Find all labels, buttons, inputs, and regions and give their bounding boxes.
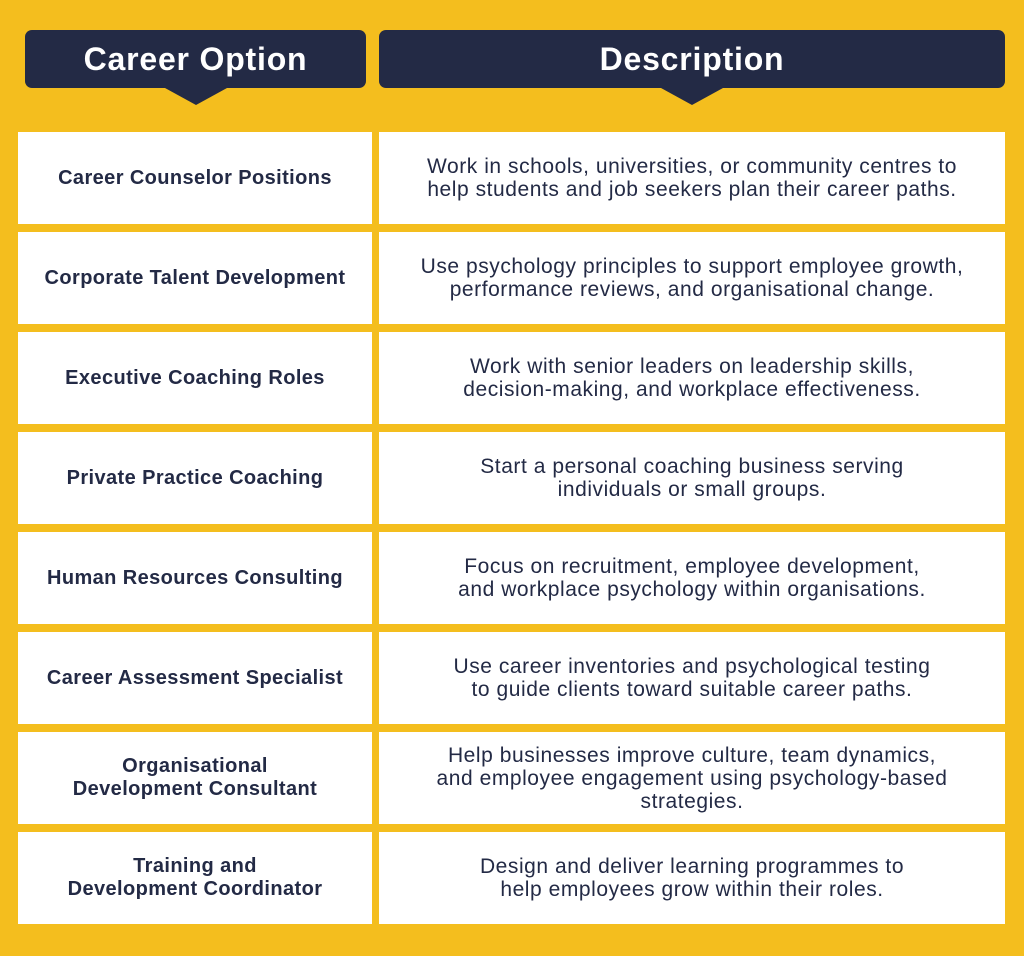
row 5 option: [18, 532, 372, 624]
row 6 option: [18, 632, 372, 724]
row 8 option: Development Coordinator: [68, 878, 322, 900]
row 1 option: Career Counselor Positions: [58, 166, 332, 188]
row 1 description: Work in schools, universities, or community centres to: [427, 155, 957, 178]
row 6 description: [379, 632, 1005, 724]
row 8 option: Training and: [133, 855, 257, 877]
row 3 description: [379, 332, 1005, 424]
row 7 description: and employee engagement using psychology-based: [437, 766, 947, 790]
row 6 description: to guide clients toward suitable career paths.: [472, 678, 912, 701]
row 1 option: [18, 132, 372, 224]
row 7 description: [379, 732, 1005, 824]
row 6 option: Career Assessment Specialist: [47, 666, 343, 688]
header: description: Description: [600, 40, 784, 76]
row 5 option: Human Resources Consulting: [47, 566, 343, 588]
row 2 description: [379, 232, 1005, 324]
header: description: [379, 30, 1005, 88]
row 3 description: Work with senior leaders on leadership skills,: [470, 355, 914, 378]
row 3 option: Executive Coaching Roles: [65, 366, 325, 388]
row 3 option: [18, 332, 372, 424]
row 7 description: strategies.: [641, 790, 743, 812]
row 3 description: decision-making, and workplace effectiveness.: [463, 378, 921, 401]
row 1 description: [379, 132, 1005, 224]
row 8 description: help employees grow within their roles.: [500, 878, 884, 901]
row 7 option: Organisational: [122, 755, 268, 777]
header: career option: Career Option: [84, 40, 307, 76]
header: career option: [25, 30, 366, 88]
row 7 option: [18, 732, 372, 824]
row 7 option: Development Consultant: [73, 778, 317, 800]
row 6 description: Use career inventories and psychological testing: [454, 655, 930, 678]
row 4 description: individuals or small groups.: [558, 478, 826, 501]
row 4 option: [18, 432, 372, 524]
row 5 description: Focus on recruitment, employee development,: [464, 555, 920, 578]
row 5 description: and workplace psychology within organisations.: [458, 578, 926, 601]
row 5 description: [379, 532, 1005, 624]
row 4 description: Start a personal coaching business serving: [480, 455, 904, 478]
row 2 description: performance reviews, and organisational change.: [450, 278, 934, 301]
row 7 description: Help businesses improve culture, team dynamics,: [448, 744, 936, 766]
row 2 option: Corporate Talent Development: [45, 266, 345, 288]
row 2 option: [18, 232, 372, 324]
row 8 description: Design and deliver learning programmes to: [480, 855, 904, 878]
row 2 description: Use psychology principles to support employee growth,: [421, 255, 963, 278]
row 4 option: Private Practice Coaching: [67, 466, 323, 488]
row 8 description: [379, 832, 1005, 924]
row 4 description: [379, 432, 1005, 524]
row 8 option: [18, 832, 372, 924]
row 1 description: help students and job seekers plan their career paths.: [427, 178, 957, 201]
